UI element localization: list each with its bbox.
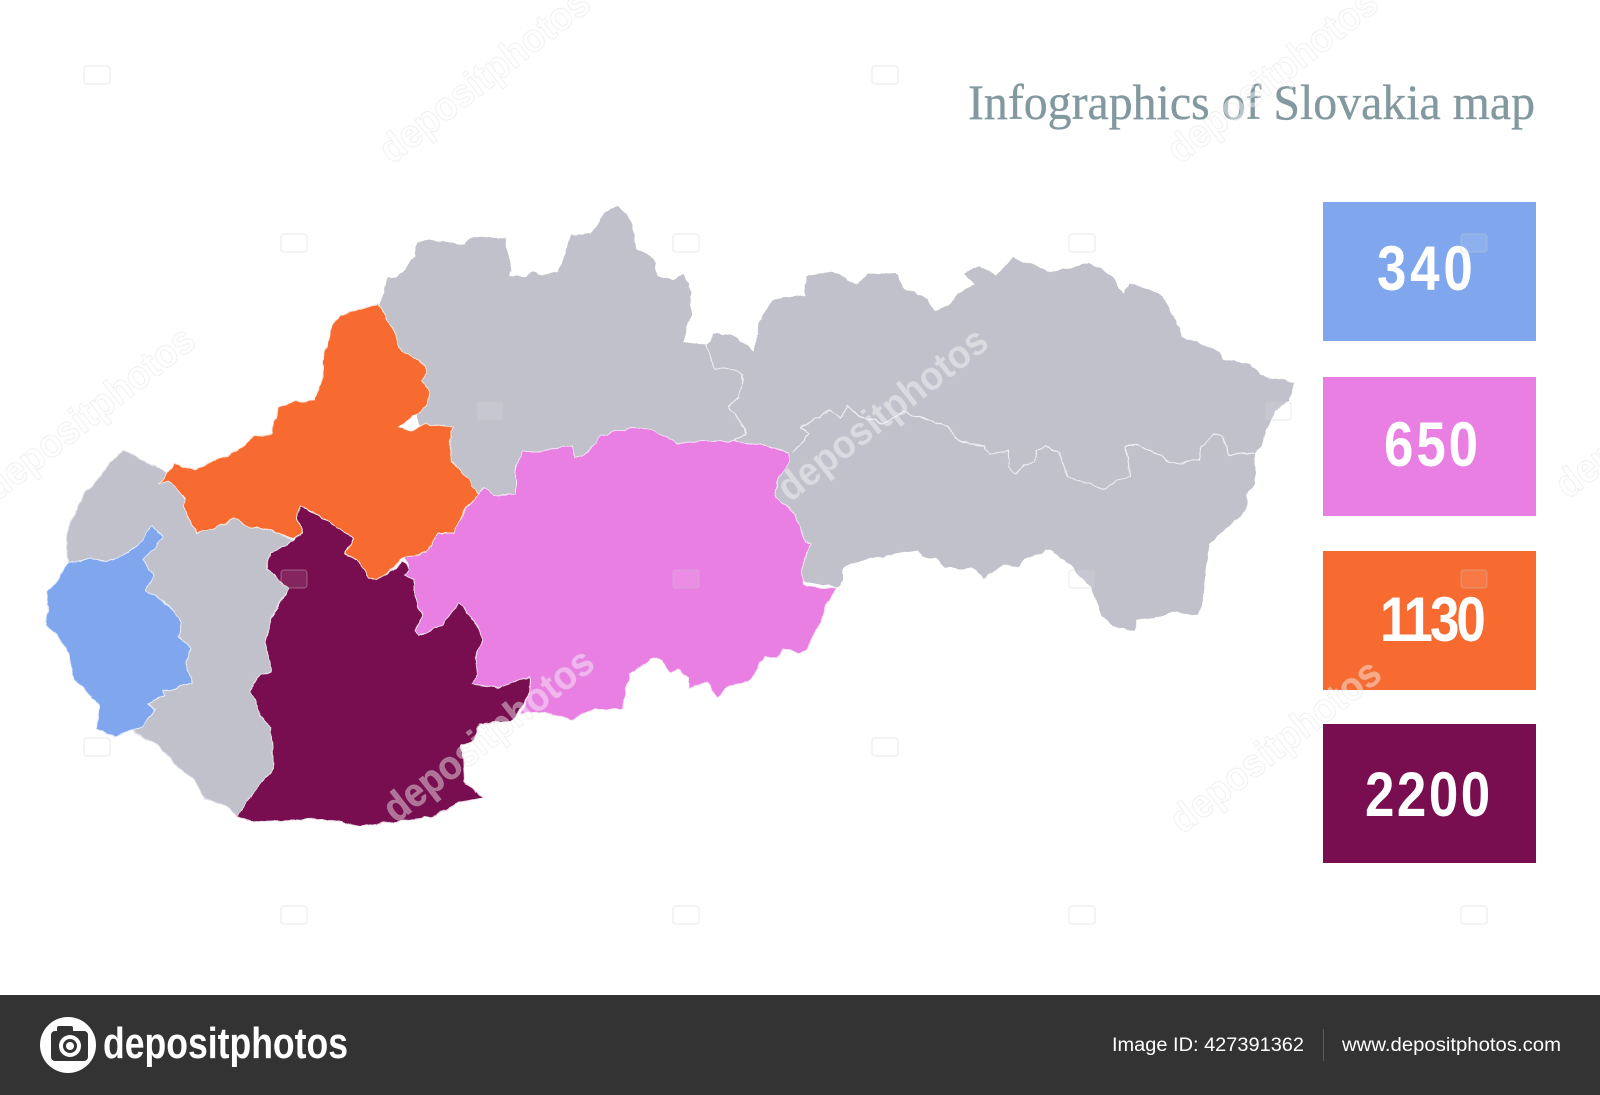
footer image id: Image ID: 427391362 <box>1112 1035 1304 1056</box>
legend item 340: 340 <box>1377 234 1473 304</box>
watermarks: depositphotos <box>1161 650 1389 842</box>
footer logo wordmark: depositphotos <box>103 1019 348 1068</box>
footer divider <box>1323 1029 1324 1061</box>
legend <box>1323 202 1536 863</box>
watermarks: depositphotos <box>374 639 602 831</box>
region: maroon <box>236 506 530 826</box>
legend item 2200: 2200 <box>1365 760 1490 830</box>
legend item 650: 650 <box>1384 410 1478 480</box>
legend item 2200 <box>1323 724 1536 863</box>
title: Infographics of Slovakia map <box>968 74 1535 130</box>
legend item 1130: 1130 <box>1380 585 1486 655</box>
legend item 340 <box>1323 202 1536 341</box>
map of Slovakia <box>46 206 1294 826</box>
legend item 1130 <box>1323 551 1536 690</box>
legend item 650 <box>1323 377 1536 516</box>
region: blue <box>46 526 193 736</box>
border line: north central <box>707 345 746 441</box>
watermarks <box>0 0 1600 842</box>
region: grey north and east <box>380 206 1294 631</box>
watermark camera marks <box>84 66 1487 924</box>
region: grey west <box>67 452 294 817</box>
footer bar <box>0 995 1600 1095</box>
border line: east <box>794 405 1255 489</box>
region: orange <box>159 304 478 580</box>
watermarks: depositphotos <box>768 318 996 510</box>
footer website: www.depositphotos.com <box>1341 1035 1561 1056</box>
footer logo icon <box>40 1017 96 1073</box>
region: pink <box>405 428 837 719</box>
